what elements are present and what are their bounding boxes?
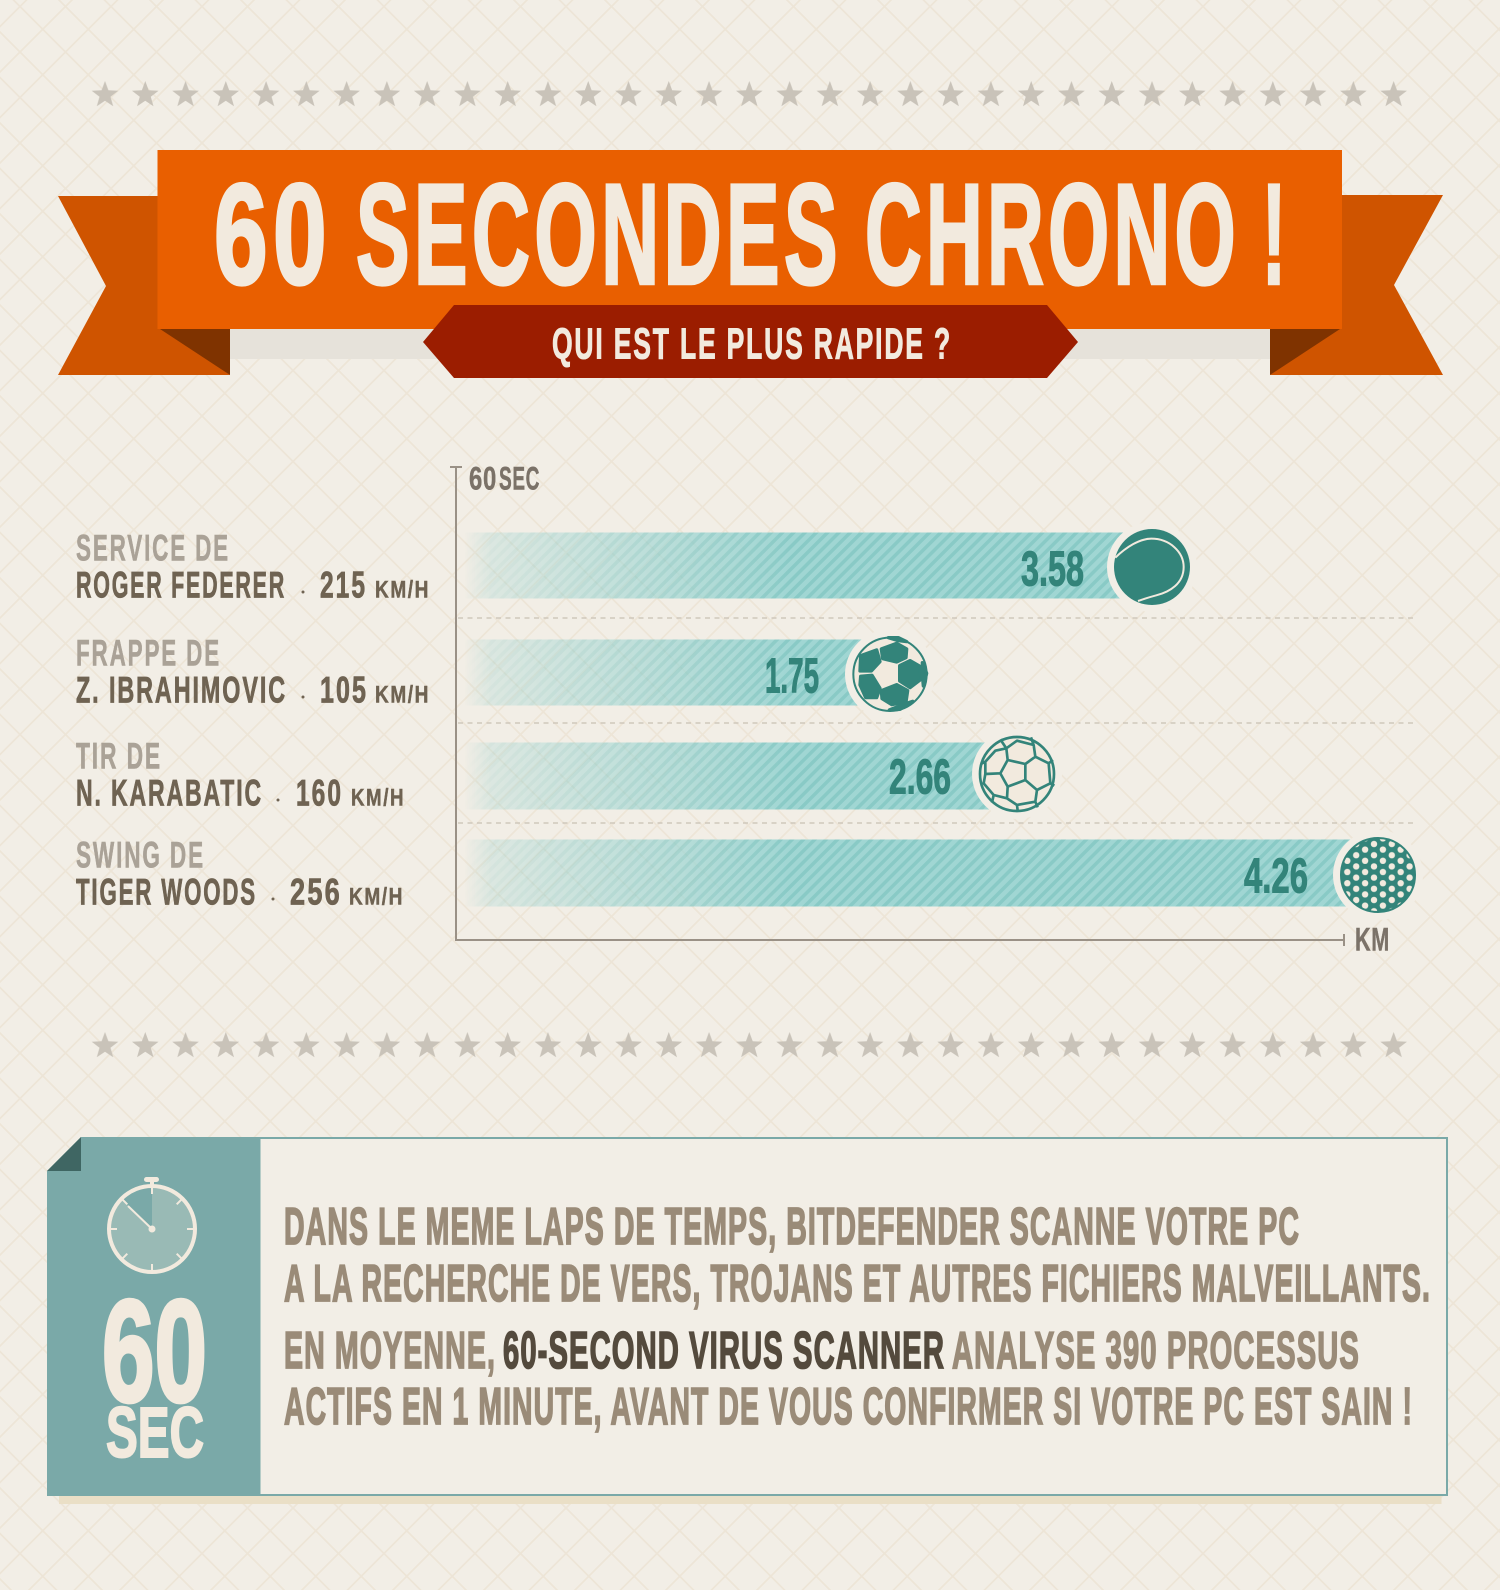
top star row (85, 75, 1414, 115)
left ribbon tail (58, 196, 230, 375)
title: ! (1262, 156, 1290, 314)
icon: stopwatch (109, 1177, 195, 1272)
label: Ibrahimovic: KM/H (375, 682, 430, 709)
panel shadow (59, 1496, 1442, 1504)
bottom star row (85, 1026, 1414, 1066)
big 60 sec: SEC (106, 1394, 204, 1473)
right ribbon tail (1270, 195, 1443, 375)
axes (450, 467, 1344, 946)
left ribbon fold (160, 329, 230, 375)
label: Woods: SWING DE (76, 834, 205, 876)
label: Ibrahimovic: FRAPPE DE (76, 632, 221, 674)
callout text: EN MOYENNE, (284, 1322, 496, 1380)
label: Ibrahimovic: Z. IBRAHIMOVIC (76, 670, 287, 710)
label: Woods (76, 834, 404, 912)
icon: tennis ball (1107, 522, 1197, 612)
label: Woods: TIGER WOODS (76, 872, 257, 912)
bar 1.75 (464, 640, 890, 706)
y axis label: SEC (499, 460, 540, 496)
ribbon shadow (230, 329, 1270, 359)
y axis label: 60 (469, 460, 497, 496)
bar 2.66 (464, 742, 1017, 810)
banner (58, 150, 1443, 378)
label: Karabatic: KM/H (351, 785, 405, 812)
label: Ibrahimovic (76, 632, 430, 710)
label: Federer (76, 528, 430, 606)
panel: bitdefender callout (47, 1137, 1447, 1504)
label: Woods: KM/H (349, 884, 404, 911)
teal side tab (47, 1137, 260, 1496)
row: Karabatic (76, 729, 1062, 819)
y axis label (469, 460, 540, 496)
value 4.26: 4.26 (1244, 850, 1308, 904)
chart (76, 460, 1423, 958)
value 3.58: 3.58 (1021, 542, 1084, 596)
label: Karabatic: N. KARABATIC (76, 772, 263, 814)
label: Federer: SERVICE DE (76, 528, 230, 568)
callout text (284, 1198, 1431, 1436)
big 60 sec (102, 1270, 207, 1473)
label: Karabatic: TIR DE (76, 736, 162, 776)
x axis label: KM (1355, 920, 1390, 958)
label: Karabatic: 160 (296, 772, 343, 814)
title: SECONDES (356, 156, 842, 314)
value 2.66: 2.66 (889, 750, 951, 804)
label: Federer: 215 (320, 564, 367, 606)
main ribbon (158, 150, 1342, 329)
bar 4.26 (464, 840, 1378, 906)
label: Federer: KM/H (375, 577, 430, 604)
row: Ibrahimovic (76, 629, 935, 719)
icon: handball (972, 729, 1062, 819)
title: 60 (214, 156, 332, 314)
right ribbon fold (1270, 329, 1340, 375)
row: Federer (76, 522, 1197, 612)
value 1.75: 1.75 (765, 650, 819, 704)
icon: golf ball (1333, 830, 1423, 920)
panel body (200, 1138, 1447, 1495)
subtitle plate (423, 305, 1078, 378)
big 60 sec: 60 (102, 1270, 207, 1432)
folded corner (47, 1137, 81, 1171)
icon: soccer ball (845, 629, 935, 719)
label: Karabatic (76, 736, 405, 814)
label: Federer: ROGER FEDERER (76, 564, 286, 606)
row: Woods (76, 830, 1423, 920)
bar 3.58 (464, 532, 1152, 598)
label: Ibrahimovic: 105 (320, 670, 368, 710)
subtitle: QUI EST LE PLUS RAPIDE ? (552, 320, 952, 368)
callout text: 60-SECOND VIRUS SCANNER (503, 1322, 945, 1380)
label: Woods: 256 (290, 872, 342, 912)
